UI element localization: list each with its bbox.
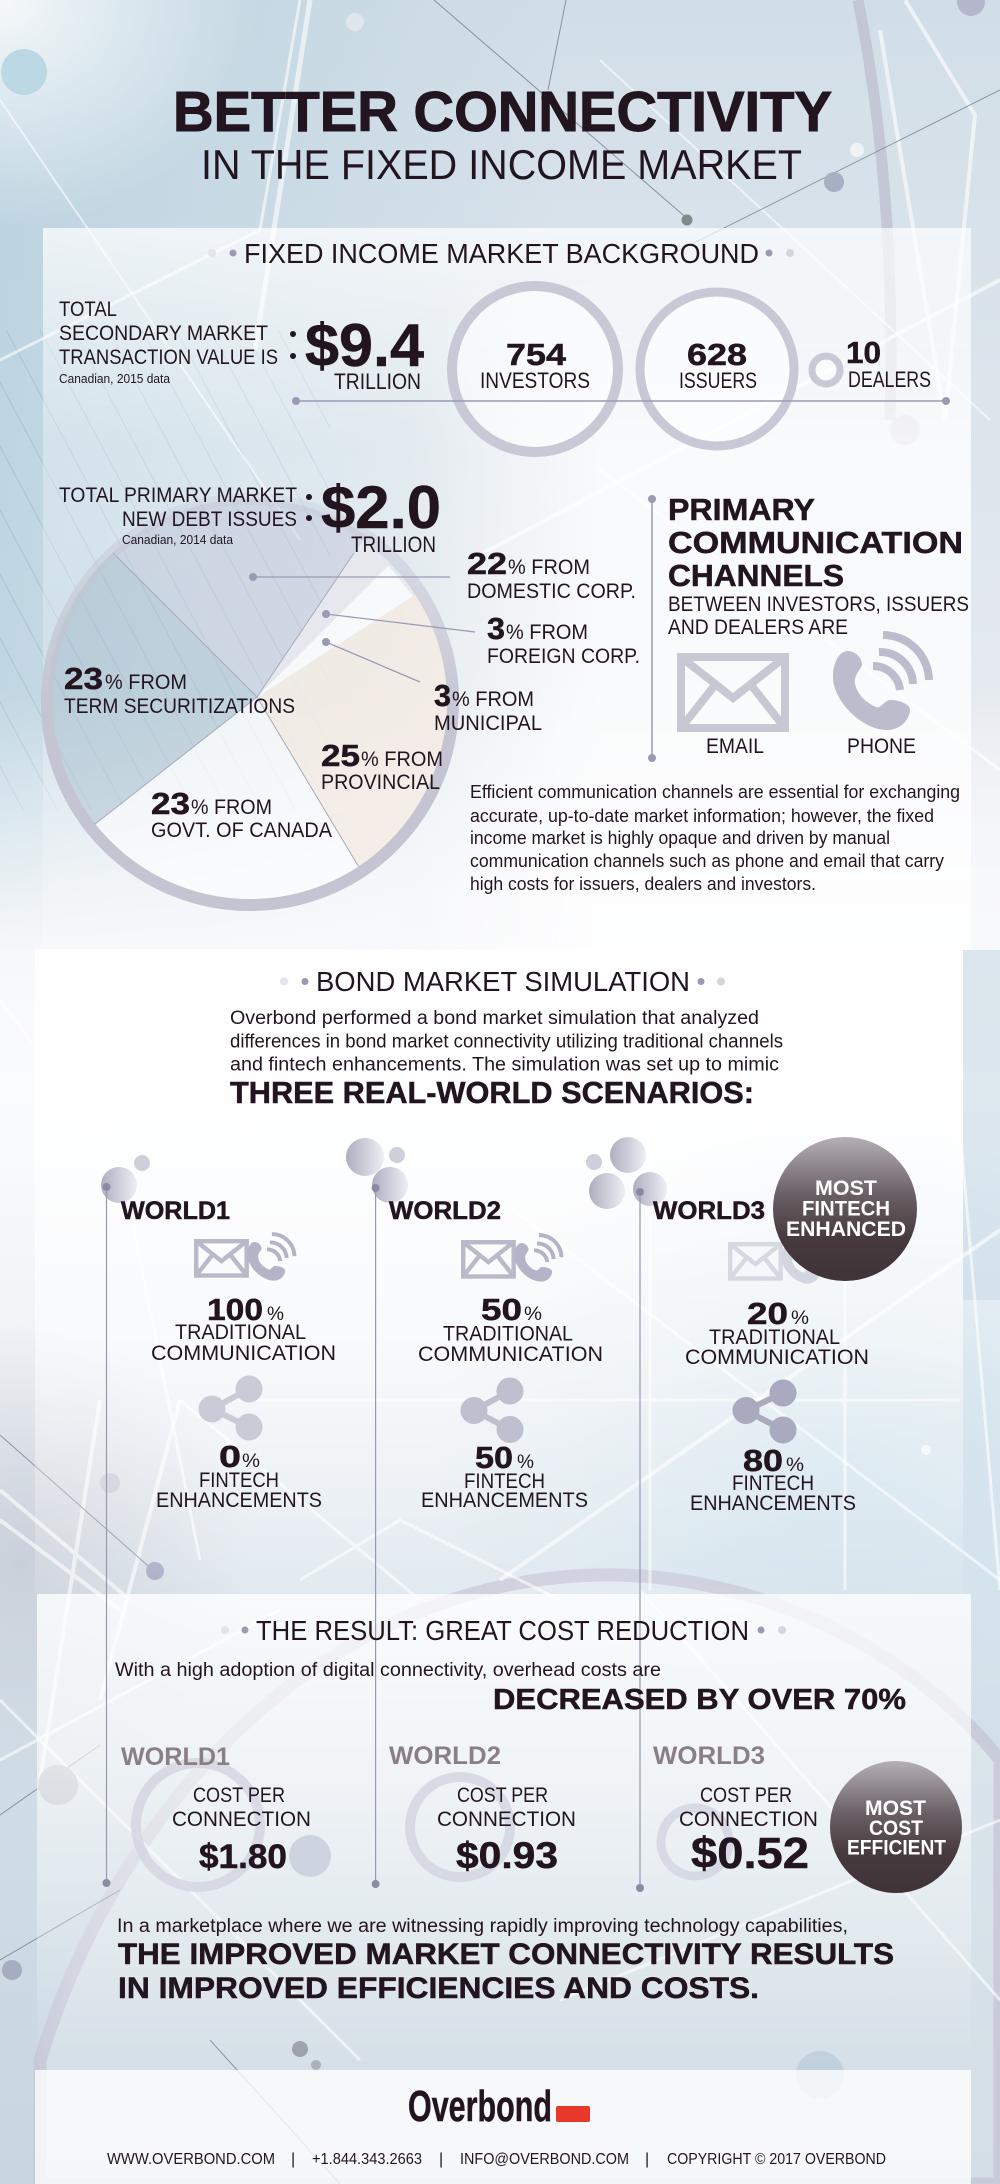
primary market value: TOTAL PRIMARY MARKET	[59, 484, 297, 507]
text: cost reduction	[115, 1660, 906, 1716]
primary market value: $2.0	[321, 474, 441, 541]
primary communication channels: AND DEALERS ARE	[668, 616, 848, 639]
icon: email and phone	[730, 1244, 819, 1284]
callout: govt of canada: 23	[151, 786, 190, 821]
text: communication paragraph	[470, 782, 960, 894]
world 1 column: COMMUNICATION	[151, 1342, 336, 1365]
text: cost reduction: DECREASED BY OVER 70%	[493, 1684, 906, 1716]
dealers ring: DEALERS	[848, 367, 931, 392]
primary market value: TRILLION	[351, 532, 436, 557]
world 1 column: %	[242, 1451, 260, 1472]
icon: email and phone	[196, 1234, 294, 1281]
footer contact line: +1.844.343.2663	[312, 2151, 422, 2168]
primary communication channels: BETWEEN INVESTORS, ISSUERS	[668, 593, 969, 616]
badge: most fintech enhanced: ENHANCED	[786, 1218, 906, 1241]
world 2 column	[346, 1138, 603, 1888]
investors circle	[452, 286, 618, 452]
dealers ring: 10	[846, 335, 881, 370]
result: world 2: $0.93	[456, 1835, 558, 1876]
dealers ring	[812, 335, 931, 392]
world 1 column: WORLD1	[121, 1197, 230, 1225]
text: conclusion: In a marketplace where we are witnessing rapidly improving technology capabilities,	[117, 1916, 848, 1937]
primary communication channels: COMMUNICATION	[668, 525, 963, 560]
badge: most fintech enhanced	[773, 1137, 917, 1281]
callout: provincial: % FROM	[361, 748, 443, 771]
callout: domestic corp: DOMESTIC CORP.	[467, 580, 636, 603]
text: communication paragraph: communication channels such as phone and email that carry	[470, 851, 944, 871]
world 2 column: TRADITIONAL	[443, 1322, 573, 1346]
text: simulation intro: Overbond performed a bond market simulation that analyzed	[230, 1008, 759, 1029]
world 2 column: WORLD2	[389, 1197, 501, 1225]
panel: fixed income market background	[43, 228, 971, 834]
world 2 column: COMMUNICATION	[418, 1343, 603, 1366]
badge: most fintech enhanced: MOST	[815, 1177, 877, 1200]
investors circle: 754	[506, 337, 567, 372]
badge: most cost efficient	[830, 1761, 962, 1893]
result: world 2: COST PER	[457, 1784, 548, 1807]
text: conclusion: IN IMPROVED EFFICIENCIES AND COSTS.	[118, 1972, 759, 2005]
callout: foreign corp: FOREIGN CORP.	[487, 645, 640, 668]
footer contact line	[107, 2151, 886, 2168]
primary communication channels: PRIMARY	[668, 492, 815, 527]
callout: domestic corp	[249, 546, 636, 603]
secondary market value: SECONDARY MARKET	[59, 322, 268, 345]
text: simulation intro: differences in bond market connectivity utilizing traditional channels	[230, 1032, 783, 1052]
callout: foreign corp: 3	[487, 611, 505, 646]
investors circle: INVESTORS	[480, 368, 590, 393]
world 1 column: %	[267, 1304, 284, 1325]
result: world 1: WORLD1	[121, 1743, 230, 1771]
text: cost reduction: With a high adoption of digital connectivity, overhead costs are	[115, 1660, 661, 1681]
callout: foreign corp	[322, 610, 640, 668]
secondary market value: TRILLION	[334, 369, 421, 394]
callout: govt of canada	[151, 786, 332, 842]
secondary market value: TOTAL	[59, 298, 117, 321]
world 1 column: FINTECH	[199, 1469, 279, 1492]
world 2 column: FINTECH	[464, 1470, 545, 1493]
world 1 column: ENHANCEMENTS	[156, 1489, 322, 1512]
world 2 column: 50	[481, 1292, 522, 1327]
callout: term securitizations	[64, 661, 295, 718]
badge: most cost efficient: COST	[869, 1817, 923, 1840]
badge: most cost efficient: MOST	[865, 1797, 926, 1820]
callout: term securitizations: TERM SECURITIZATIONS	[64, 695, 295, 718]
title	[173, 80, 832, 188]
world 2 column: %	[517, 1452, 534, 1473]
footer contact line: |	[291, 2151, 295, 2168]
primary communication channels: CHANNELS	[668, 558, 844, 593]
callout: provincial	[321, 738, 443, 794]
text: simulation intro	[230, 1008, 783, 1110]
connector line	[292, 397, 950, 405]
callout: provincial: PROVINCIAL	[321, 771, 440, 794]
footer contact line: |	[439, 2151, 443, 2168]
badge: most cost efficient: EFFICIENT	[847, 1836, 946, 1860]
pie chart	[41, 493, 459, 911]
callout: domestic corp: 22	[467, 546, 507, 581]
world 3 column: TRADITIONAL	[709, 1326, 840, 1349]
result: world 1: CONNECTION	[172, 1808, 311, 1831]
result: world 1: $1.80	[199, 1838, 287, 1876]
secondary market value: $9.4	[305, 312, 425, 379]
text: communication paragraph: accurate, up-to-date market information; however, the fixed	[470, 806, 934, 826]
icon: phone: PHONE	[847, 735, 916, 758]
text: simulation intro: and fintech enhancements. The simulation was set up to mimic	[230, 1054, 779, 1076]
issuers circle	[640, 292, 794, 446]
callout: municipal: MUNICIPAL	[434, 712, 542, 735]
world 3 column: FINTECH	[732, 1472, 814, 1495]
result: world 3: WORLD3	[653, 1742, 765, 1770]
text: communication paragraph: high costs for issuers, dealers and investors.	[470, 874, 816, 894]
callout: govt of canada: GOVT. OF CANADA	[151, 819, 332, 842]
secondary market value	[59, 298, 425, 394]
world 2 column: ENHANCEMENTS	[421, 1489, 588, 1512]
result: world 1	[121, 1743, 331, 1887]
footer contact line: |	[645, 2151, 649, 2168]
heading: fixed income market background: FIXED INCOME MARKET BACKGROUND	[244, 238, 759, 269]
footer contact line: WWW.OVERBOND.COM	[107, 2151, 275, 2168]
issuers circle: ISSUERS	[679, 368, 757, 393]
callout: municipal	[322, 638, 542, 735]
title: BETTER CONNECTIVITY	[173, 80, 832, 144]
world 2 column: 50	[475, 1440, 513, 1475]
world 3 column	[586, 1137, 869, 1892]
callout: municipal: % FROM	[452, 688, 534, 711]
result: world 3	[653, 1742, 818, 1878]
footer contact line: INFO@OVERBOND.COM	[460, 2151, 629, 2168]
result: world 2	[389, 1742, 576, 1877]
icon: email	[681, 657, 785, 758]
result: world 3: CONNECTION	[679, 1808, 818, 1831]
panel: the result	[37, 1594, 971, 2070]
world 1 column: 100	[207, 1292, 263, 1327]
world 3 column: WORLD3	[653, 1197, 765, 1225]
result: world 3: $0.52	[691, 1829, 809, 1878]
title: IN THE FIXED INCOME MARKET	[201, 141, 802, 188]
primary market value: NEW DEBT ISSUES	[122, 508, 297, 531]
result: world 3: COST PER	[700, 1784, 792, 1807]
callout: foreign corp: % FROM	[506, 621, 588, 644]
icon: share network	[461, 1378, 523, 1442]
callout: municipal: 3	[434, 678, 451, 713]
result: world 2: WORLD2	[389, 1742, 501, 1770]
text: conclusion: THE IMPROVED MARKET CONNECTIVITY RESULTS	[118, 1938, 894, 1971]
text: simulation intro: THREE REAL-WORLD SCENARIOS:	[230, 1075, 754, 1110]
world 1 column: 0	[219, 1439, 241, 1474]
world 3 column: ENHANCEMENTS	[690, 1492, 856, 1515]
world 3 column: 20	[747, 1296, 788, 1331]
heading: the result: THE RESULT: GREAT COST REDUCTION	[256, 1615, 749, 1646]
text: communication paragraph: income market is highly opaque and driven by manual	[470, 828, 890, 848]
result: world 2: CONNECTION	[437, 1808, 576, 1831]
icon: email: EMAIL	[706, 735, 764, 758]
callout: govt of canada: % FROM	[191, 796, 272, 819]
primary market value	[59, 474, 441, 557]
world 3 column: 80	[743, 1443, 783, 1478]
issuers circle: 628	[687, 337, 747, 372]
callout: domestic corp: % FROM	[508, 556, 590, 579]
world 3 column: %	[791, 1308, 809, 1329]
icon: share network	[199, 1376, 262, 1440]
logo: overbond: Overbond	[408, 2082, 552, 2131]
heading: bond market simulation: BOND MARKET SIMULATION	[316, 966, 690, 997]
world 1 column	[101, 1155, 336, 1887]
icon: phone	[833, 635, 929, 758]
text: conclusion	[117, 1916, 894, 2005]
world 2 column: %	[524, 1304, 542, 1325]
badge: most fintech enhanced: FINTECH	[802, 1198, 890, 1221]
callout: term securitizations: 23	[64, 661, 103, 696]
result: world 1: COST PER	[193, 1784, 285, 1807]
panel: bond market simulation	[35, 949, 963, 1594]
secondary market value: Canadian, 2015 data	[59, 372, 170, 386]
icon: email and phone	[463, 1235, 561, 1282]
world 3 column: %	[786, 1455, 804, 1476]
panel: footer	[35, 2070, 971, 2184]
primary communication channels	[648, 492, 969, 762]
world 1 column: TRADITIONAL	[175, 1321, 306, 1344]
text: communication paragraph: Efficient communication channels are essential for exchanging	[470, 782, 960, 802]
callout: provincial: 25	[321, 738, 360, 773]
secondary market value: TRANSACTION VALUE IS	[59, 346, 278, 369]
icon: share network	[733, 1380, 796, 1443]
footer contact line: COPYRIGHT © 2017 OVERBOND	[667, 2151, 886, 2168]
world 3 column: COMMUNICATION	[685, 1346, 869, 1369]
primary market value: Canadian, 2014 data	[122, 533, 233, 547]
callout: term securitizations: % FROM	[105, 671, 187, 694]
